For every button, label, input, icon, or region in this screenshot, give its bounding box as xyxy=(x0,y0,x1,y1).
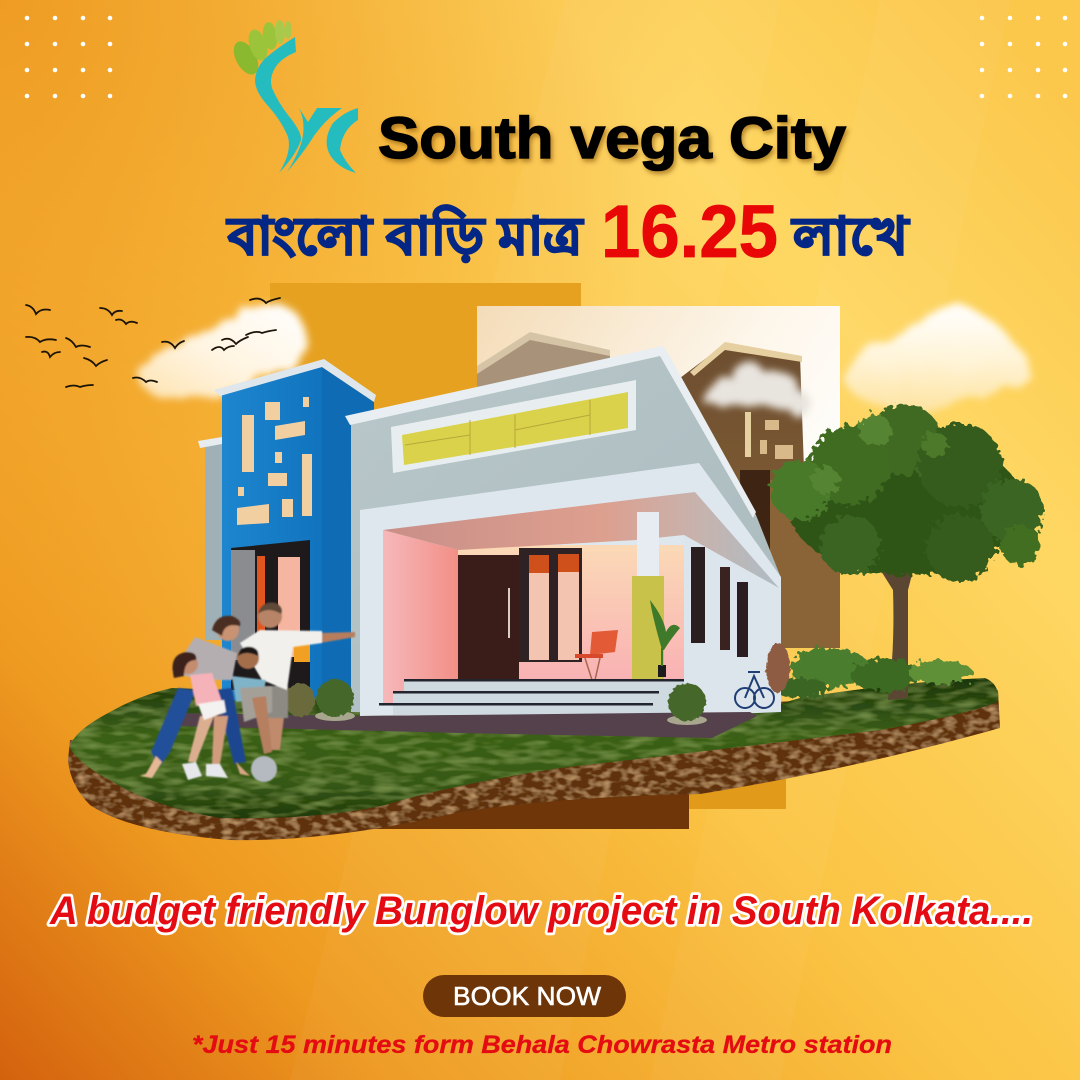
headline: Bengali price line xyxy=(226,190,910,273)
footnote: *Just 15 minutes form Behala Chowrasta Metro station xyxy=(192,1031,892,1059)
button: book now: BOOK NOW xyxy=(453,981,601,1011)
planter bushes xyxy=(315,679,707,725)
chair xyxy=(575,630,618,680)
house: porch xyxy=(360,463,781,716)
bicycle xyxy=(735,672,774,708)
tree trunk xyxy=(868,530,922,700)
football xyxy=(251,756,277,782)
potted plant xyxy=(650,600,680,677)
side wall xyxy=(684,535,781,716)
man xyxy=(240,602,355,750)
house: blue tower xyxy=(214,359,376,700)
backdrop block: orange xyxy=(270,283,581,483)
backdrop block: lower orange xyxy=(689,770,786,809)
front door xyxy=(458,555,519,682)
entrance steps xyxy=(379,679,684,715)
brand name: South vega City xyxy=(378,106,846,171)
tagline: A budget friendly Bunglow project in South Kolkata.... xyxy=(49,889,1033,933)
backdrop block: lower brown xyxy=(330,780,689,829)
house: main wall xyxy=(345,346,781,712)
clerestory window xyxy=(391,380,636,473)
house: side wing xyxy=(198,437,222,640)
terrain: soil edge xyxy=(68,690,1000,840)
tree canopy xyxy=(770,404,1044,582)
tree xyxy=(770,404,1044,700)
boy xyxy=(232,647,272,754)
headline: Bengali price line: লাখে xyxy=(791,208,910,266)
dot grid: top left xyxy=(25,16,112,98)
column xyxy=(637,512,659,578)
button: book now xyxy=(423,975,626,1017)
logo icon xyxy=(229,20,358,173)
porch window xyxy=(519,548,582,662)
tower openings xyxy=(237,397,312,525)
cloud: right xyxy=(845,305,1030,411)
flower bushes xyxy=(285,643,790,717)
headline: Bengali price line: 16.25 xyxy=(601,190,778,273)
family playing xyxy=(140,602,355,782)
girl xyxy=(172,652,228,780)
woman xyxy=(140,616,250,778)
cloud: over brown house xyxy=(705,364,812,417)
terrain: grass lawn xyxy=(70,678,998,818)
flock of birds xyxy=(26,298,280,387)
dot grid: top right xyxy=(980,16,1067,98)
cloud: left xyxy=(140,305,306,398)
headline: Bengali price line: বাংলো বাড়ি মাত্র xyxy=(226,205,584,266)
tower doorway xyxy=(231,540,310,690)
backdrop panel: neighbouring houses xyxy=(477,306,840,648)
shrubs: right of house xyxy=(772,648,972,698)
walkway xyxy=(178,712,757,738)
